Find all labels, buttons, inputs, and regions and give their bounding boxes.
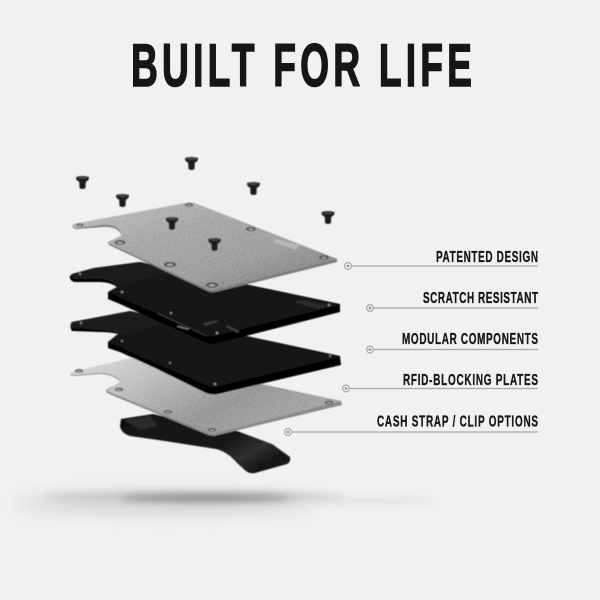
top silver plate <box>72 203 337 292</box>
screws <box>76 157 334 251</box>
callout: modular components <box>367 330 538 353</box>
lower black plate <box>70 311 341 394</box>
title: BUILT FOR LIFE <box>131 32 472 99</box>
callout: scratch resistant: SCRATCH RESISTANT <box>423 289 538 307</box>
callout: cash strap / clip options <box>285 412 538 435</box>
callout: rfid-blocking plates <box>343 371 538 392</box>
callout: rfid-blocking plates: RFID-BLOCKING PLATES <box>403 371 538 389</box>
callout: scratch resistant <box>367 289 538 311</box>
callout: patented design <box>345 248 538 269</box>
upper black plate <box>70 262 340 344</box>
callout: modular components: MODULAR COMPONENTS <box>402 330 538 348</box>
cash strap clip <box>120 414 290 473</box>
lower silver plate <box>70 357 342 436</box>
engraved logo <box>273 239 299 250</box>
floor shadow <box>15 492 435 512</box>
callout: patented design: PATENTED DESIGN <box>436 248 538 266</box>
exploded wallet stack <box>70 157 342 473</box>
callout: cash strap / clip options: CASH STRAP / CLIP OPTIONS <box>377 412 538 430</box>
